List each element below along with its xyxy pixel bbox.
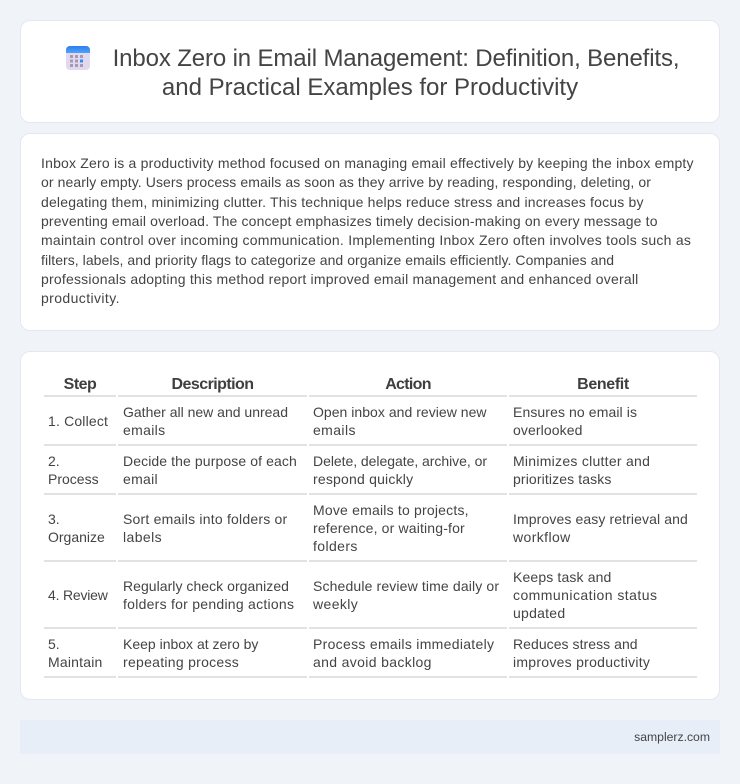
table header	[44, 376, 697, 397]
table header: Action	[385, 376, 431, 393]
intro paragraph: filters, labels, and priority flags to categorize and organize emails efficiently. Companies and	[41, 252, 614, 268]
row: review: Schedule review time daily or	[313, 578, 499, 594]
title	[113, 45, 679, 101]
row: process: Delete, delegate, archive, or	[313, 453, 487, 469]
row: process	[44, 453, 697, 495]
intro paragraph: productivity.	[41, 290, 120, 306]
footer source text: samplerz.com	[634, 730, 710, 744]
row: maintain	[44, 636, 697, 678]
row: process: Decide the purpose of each	[123, 453, 297, 469]
icon: calendar	[66, 46, 90, 70]
row: maintain: repeating process	[123, 654, 239, 670]
table header: Description	[172, 376, 253, 393]
row: organize: folders	[313, 538, 358, 554]
row: organize: workflow	[513, 529, 571, 545]
intro paragraph: or nearly empty. Users process emails as soon as they arrive by reading, responding, deleting, or	[41, 174, 651, 190]
row: collect: emails	[123, 422, 165, 438]
row: maintain: and avoid backlog	[313, 654, 432, 670]
row: process: email	[123, 471, 158, 487]
title: and Practical Examples for Productivity	[162, 74, 578, 101]
row: organize: Sort emails into folders or	[123, 511, 287, 527]
panel: introduction	[20, 133, 720, 331]
row: organize	[44, 502, 697, 562]
row: collect: Gather all new and unread	[123, 404, 288, 420]
row: organize: Move emails to projects,	[313, 502, 469, 518]
row: process: Minimizes clutter and	[513, 453, 650, 469]
intro paragraph: Inbox Zero is a productivity method focused on managing email effectively by keeping the inbox empty	[41, 155, 694, 171]
row: maintain: Process emails immediately	[313, 636, 494, 652]
row: organize: labels	[123, 529, 162, 545]
panel: steps table	[20, 351, 720, 700]
row: organize: 3.	[48, 511, 60, 527]
row: maintain: improves productivity	[513, 654, 650, 670]
row: process: respond quickly	[313, 471, 413, 487]
row: review: weekly	[313, 596, 358, 612]
row: review: Keeps task and	[513, 569, 611, 585]
row: process: Process	[48, 471, 99, 487]
row: collect: overlooked	[513, 422, 582, 438]
row: maintain: 5.	[48, 636, 60, 652]
row: collect: Open inbox and review new	[313, 404, 487, 420]
title card	[20, 20, 720, 123]
row: maintain: Keep inbox at zero by	[123, 636, 258, 652]
row: review: communication status	[513, 587, 657, 603]
footer bar	[20, 720, 720, 754]
intro paragraph: delegating them, minimizing clutter. This technique helps reduce stress and increases focus by	[41, 194, 644, 210]
row: review: 4. Review	[48, 587, 108, 603]
row: process: 2.	[48, 453, 60, 469]
row: maintain: Maintain	[48, 654, 103, 670]
row: review: Regularly check organized	[123, 578, 289, 594]
intro paragraph: maintain control over incoming communication. Implementing Inbox Zero often involves tools such as	[41, 232, 691, 248]
row: collect: emails	[313, 422, 356, 438]
row: review: folders for pending actions	[123, 596, 294, 612]
row: review: updated	[513, 605, 565, 621]
intro paragraph	[41, 155, 694, 306]
row: organize: Improves easy retrieval and	[513, 511, 688, 527]
row: organize: Organize	[48, 529, 105, 545]
row: review	[44, 569, 697, 629]
row: process: prioritizes tasks	[513, 471, 612, 487]
intro paragraph: professionals adopting this method report improved email management and enhanced overall	[41, 271, 638, 287]
row: organize: reference, or waiting-for	[313, 520, 465, 536]
row: collect: Ensures no email is	[513, 404, 637, 420]
table header: Step	[64, 376, 96, 393]
row: collect	[44, 404, 697, 446]
row: maintain: Reduces stress and	[513, 636, 638, 652]
table header: Benefit	[577, 376, 629, 393]
row: collect: 1. Collect	[48, 413, 108, 429]
intro paragraph: preventing email overload. The concept emphasizes timely decision-making on every message to	[41, 213, 658, 229]
title: Inbox Zero in Email Management: Definition, Benefits,	[113, 45, 679, 72]
